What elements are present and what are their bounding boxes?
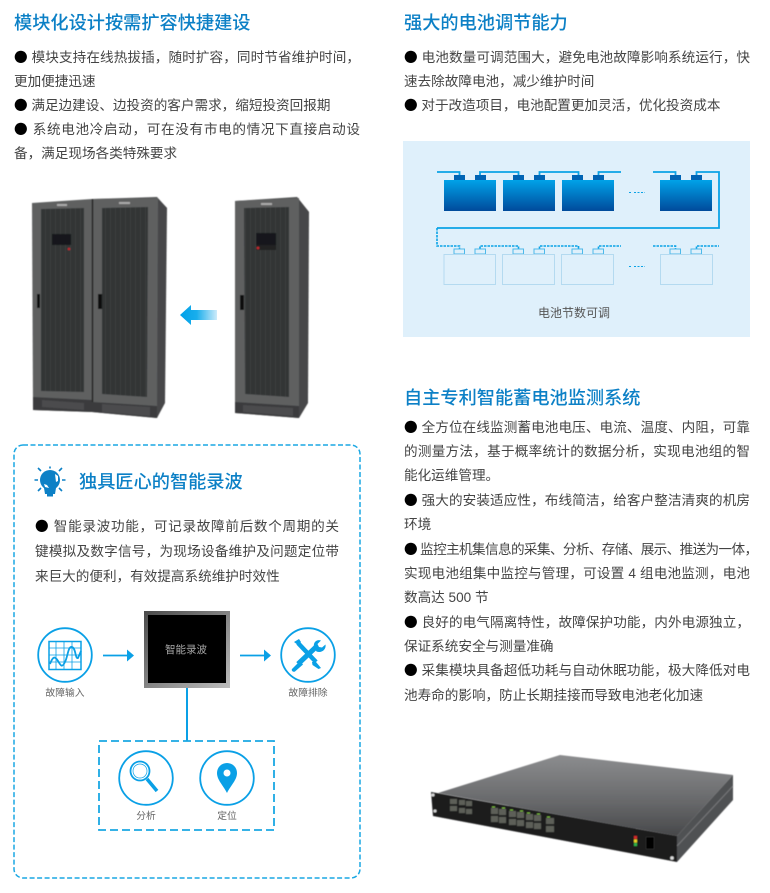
text block: smart waveform recording description: ● 智能录波功能，可记录故障前后数个周期的关: [35, 515, 339, 535]
dashed group: analysis and location: [99, 741, 274, 830]
text block: battery monitoring bullets: ● 监控主机集信息的采集、分析、存储、展示、推送为一体，: [404, 538, 757, 558]
text block: battery monitoring bullets: ● 全方位在线监测蓄电池电压、电流、温度、内阻，可靠: [404, 416, 750, 436]
text block: battery monitoring bullets: ● 强大的安装适应性，布线简洁，给客户整洁清爽的机房: [404, 489, 750, 509]
arrow: recorder to troubleshooting: [240, 650, 271, 662]
label: analysis: 分析: [136, 809, 156, 822]
left cabinet pair: [32, 197, 167, 418]
text block: battery adjustment bullets: ● 对于改造项目，电池配置更加灵活，优化投资成本: [404, 94, 720, 114]
text block: battery monitoring bullets: 能化运维管理。: [404, 468, 499, 483]
heading: smart waveform recording: 独具匠心的智能录波: [79, 472, 243, 492]
device ports: [450, 799, 554, 832]
heading: battery monitoring: 自主专利智能蓄电池监测系统: [404, 388, 640, 408]
text block: battery monitoring bullets: ● 采集模块具备超低功耗与自动休眠功能，极大降低对电: [404, 659, 750, 679]
text block: modular design bullets: ● 满足边建设、边投资的客户需求，缩短投资回报期: [14, 94, 330, 114]
text block: smart waveform recording description: 键模拟及数字信号，为现场设备维护及问题定位带: [35, 544, 339, 559]
text block: battery adjustment bullets: ● 电池数量可调范围大，避免电池故障影响系统运行，快: [404, 46, 750, 66]
expansion arrow: [180, 305, 217, 325]
device port LEDs: [492, 807, 550, 817]
heading: battery adjustment: 强大的电池调节能力: [404, 13, 568, 33]
recorder box: 智能录波: [165, 643, 207, 656]
icon: wrench and screwdriver: [281, 628, 335, 682]
text block: battery monitoring bullets: 数高达 500 节: [404, 590, 489, 605]
arrow: input to recorder: [103, 650, 134, 662]
text block: modular design bullets: ● 模块支持在线热拔插，随时扩容，同时节省维护时间，: [14, 46, 360, 66]
icon: fault input chart: [38, 628, 92, 682]
right cabinet: [235, 197, 309, 418]
text block: battery monitoring bullets: 的测量方法，基于概率统计的数据分析，实现电池组的智: [404, 444, 750, 459]
text block: modular design bullets: [14, 46, 360, 161]
icon: magnifier: [119, 751, 173, 805]
label: location: 定位: [217, 809, 237, 822]
label: troubleshooting: 故障排除: [288, 686, 328, 699]
text block: smart waveform recording description: [35, 515, 339, 584]
device indicators: [432, 794, 674, 860]
text block: battery adjustment bullets: [404, 46, 750, 114]
text block: battery adjustment bullets: 速去除故障电池，减少维护时间: [404, 74, 594, 89]
text block: battery monitoring bullets: 实现电池组集中监控与管理，可设置 4 组电池监测，电池: [404, 566, 750, 581]
text block: battery monitoring bullets: 环境: [404, 517, 431, 532]
text block: battery monitoring bullets: ● 良好的电气隔离特性，故障保护功能，内外电源独立，: [404, 611, 750, 631]
recorder box: [144, 611, 230, 688]
battery diagram caption: 电池节数可调: [538, 305, 610, 320]
text block: modular design bullets: 更加便捷迅速: [14, 74, 96, 89]
text block: battery monitoring bullets: 池寿命的影响，防止长期挂接而导致电池老化加速: [404, 688, 703, 703]
heading: modular design: 模块化设计按需扩容快捷建设: [14, 13, 250, 33]
text block: modular design bullets: ● 系统电池冷启动，可在没有市电的情况下直接启动设: [14, 118, 360, 138]
text block: battery monitoring bullets: 保证系统安全与测量准确: [404, 639, 554, 654]
text block: modular design bullets: 备，满足现场各类特殊要求: [14, 146, 177, 161]
icon: location pin: [200, 751, 254, 805]
connector: [186, 688, 188, 741]
top battery row: [437, 172, 719, 228]
label: fault input: 故障输入: [45, 686, 85, 699]
text block: smart waveform recording description: 来巨大的便利，有效提高系统维护时效性: [35, 569, 280, 584]
icon: light bulb globe: [34, 466, 66, 496]
text block: battery monitoring bullets: [404, 416, 757, 703]
bottom battery row: [437, 228, 719, 284]
